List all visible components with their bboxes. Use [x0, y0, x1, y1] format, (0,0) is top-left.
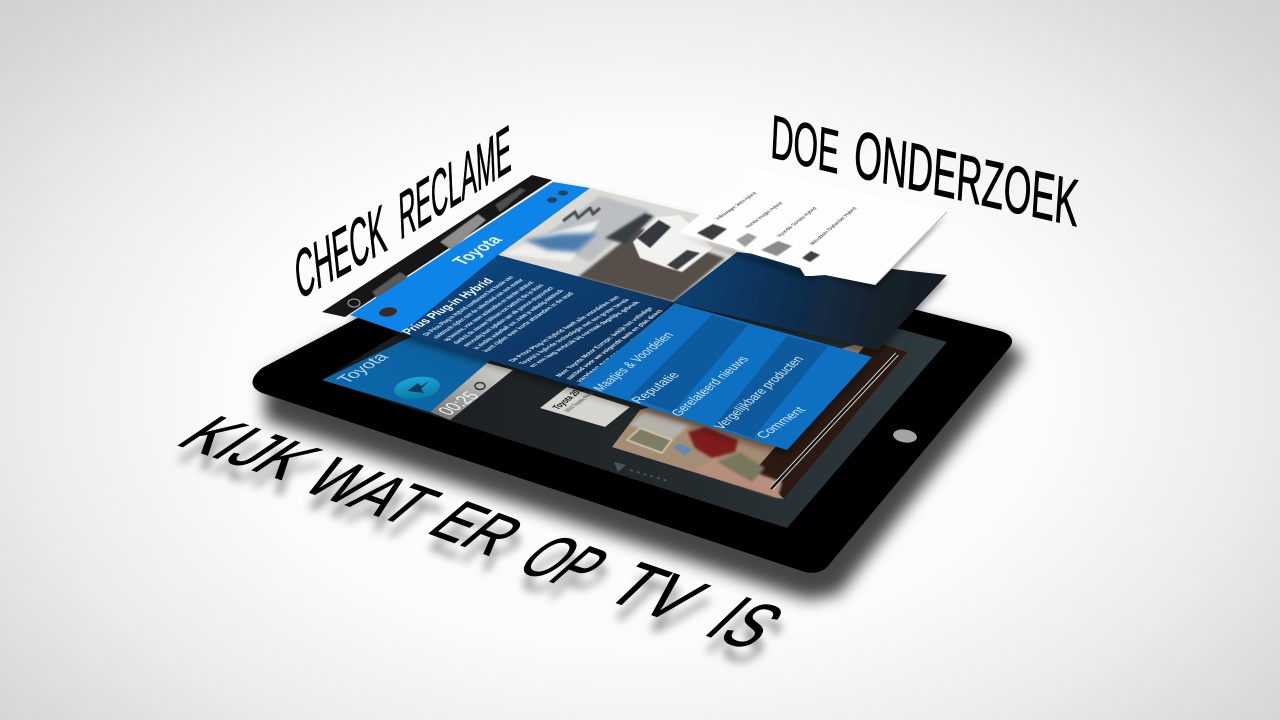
picture frame	[627, 428, 672, 453]
article paragraph 1: De Prius Plug-in Hybrid combineert het beste van	[420, 275, 516, 337]
header title: Toyota	[449, 233, 508, 268]
button arrow	[407, 381, 429, 393]
pale wall	[630, 412, 690, 440]
article paragraph 3: vandaag nog een proefrit bij de dealer	[574, 312, 675, 383]
word: kijk: KIJK	[161, 406, 339, 489]
word: tv: TV	[590, 551, 723, 633]
grey time strip	[430, 363, 513, 420]
menu	[577, 303, 872, 450]
item 3 label: Hyundai Sonata Hybrid	[775, 206, 819, 237]
header icon	[378, 306, 398, 318]
tablet screen	[322, 235, 947, 528]
home button	[892, 428, 918, 444]
article paragraph 1: kunt rijden over korte afstanden in de stad	[480, 291, 576, 353]
menu stripe 2	[630, 315, 748, 412]
blue object	[673, 444, 692, 456]
item 2 label: Honda Insight Hybrid	[743, 201, 785, 228]
word: check: CHECK	[292, 191, 390, 315]
dark strip	[322, 175, 552, 317]
photo: car grille	[667, 250, 700, 270]
word: op: OP	[501, 524, 626, 602]
time code: 00:25	[434, 390, 485, 418]
layer: ad strip	[322, 175, 552, 317]
article paragraph 2: De Prius Plug-in Hybrid heeft alle voordelen van	[507, 295, 622, 362]
article paragraph 1: in slechts anderhalf uur, zodat je volledig elektrisch	[470, 289, 566, 350]
menu item 2: Reputatie	[629, 370, 683, 406]
photo: road	[578, 228, 725, 302]
article paragraph 1: elektrisch rijden met de zekerheid van een motor	[430, 278, 526, 339]
photo: dark glass zigzag	[563, 208, 600, 221]
photo: car body	[633, 215, 713, 272]
menu item 1: Maatjes & Voordelen	[590, 330, 677, 393]
navy right panel	[673, 252, 947, 350]
menu item 4: Vergelijkbare producten	[712, 354, 807, 432]
heading: doe onderzoek	[769, 102, 1081, 241]
menu item 3: Gerelateerd nieuws	[668, 354, 752, 418]
article paragraph 2	[507, 295, 642, 368]
screen: video thumbnail	[612, 340, 908, 499]
slider bar	[771, 354, 897, 489]
article paragraph 3	[554, 306, 675, 383]
timeline dots	[630, 470, 668, 481]
round play button	[393, 374, 441, 402]
photo: dark glass	[605, 213, 654, 244]
menu stripe 4	[715, 336, 828, 438]
blue header	[322, 300, 520, 412]
red figure	[688, 427, 738, 458]
word: wat: WAT	[287, 448, 455, 536]
strip highlight mid	[440, 214, 486, 250]
word: onderzoek: ONDERZOEK	[852, 116, 1081, 241]
photo: windshield	[637, 220, 671, 248]
article paragraph 2: Toyota's hybride technologie met een groter bereik	[517, 298, 632, 365]
header icon top right	[558, 190, 568, 196]
word: is: IS	[689, 585, 800, 662]
card text: 2012 Toyota Prius	[563, 391, 596, 412]
article paragraph 1: dankzij de nieuwe lithium-ion batterij die je thuis	[450, 283, 546, 345]
heading: kijk wat er op tv is	[161, 406, 800, 662]
header icon top	[547, 197, 557, 203]
menu item 5: Comment	[754, 405, 809, 441]
photo: grey building	[540, 196, 650, 262]
article paragraph 1: eenvoudig kunt opladen aan elk gewoon stopcontact	[460, 286, 556, 347]
thumbnail 4	[802, 251, 820, 262]
thumbnail 2	[736, 233, 757, 247]
panel edge	[875, 212, 947, 285]
article title: Prius Plug-in Hybrid	[398, 276, 497, 336]
article paragraph 1: op benzine, voor meer actieradius en minder uitstoot	[440, 280, 536, 342]
tablet shadow	[265, 226, 1025, 600]
tablet body	[252, 217, 1012, 573]
screen: program card	[540, 384, 630, 427]
article paragraph 3: aanbod voor uw volgende auto en plan direct	[564, 309, 665, 380]
text: RECLAME	[397, 112, 513, 255]
heading: check reclame	[292, 112, 513, 315]
item 4 label: Mitsubishi Outlander Hybrid	[808, 206, 859, 245]
screen: lower Toyota header	[322, 300, 520, 420]
article panel	[402, 255, 673, 387]
card title: Toyota 2012	[549, 384, 588, 411]
photo: white wedge	[503, 220, 600, 262]
clock icon	[475, 382, 485, 390]
photo: blue reflection	[524, 233, 597, 252]
article paragraph 3: Meer Toyota Motor Europe: bekijk het volledige	[554, 306, 655, 377]
strip highlight left	[372, 272, 408, 303]
tablet	[252, 217, 1012, 573]
blue header	[350, 182, 590, 333]
dark right part	[755, 340, 908, 499]
chair	[717, 452, 765, 482]
Toyota label: Toyota	[332, 350, 393, 386]
article paragraph 2: en een laag verbruik bij normaal dagelijks gebruik	[527, 301, 642, 368]
floor	[693, 458, 782, 498]
play icon	[614, 462, 626, 472]
item 1 label: Volkswagen Jetta Hybrid	[713, 191, 759, 220]
thumbnail 1	[697, 224, 727, 240]
menu base	[577, 303, 872, 450]
article paragraph 1	[420, 275, 576, 353]
clock icon	[348, 299, 360, 307]
panel shadow	[680, 216, 947, 290]
layer: Toyota app page	[350, 182, 947, 450]
layer: research panel	[678, 170, 947, 290]
thumbnail 3	[761, 241, 792, 256]
white panel	[678, 170, 947, 285]
strip highlight right	[495, 188, 526, 212]
word: doe: DOE	[769, 102, 841, 187]
word: er: ER	[413, 491, 540, 567]
image base	[612, 340, 908, 499]
card	[540, 387, 630, 427]
photo base	[498, 188, 737, 302]
